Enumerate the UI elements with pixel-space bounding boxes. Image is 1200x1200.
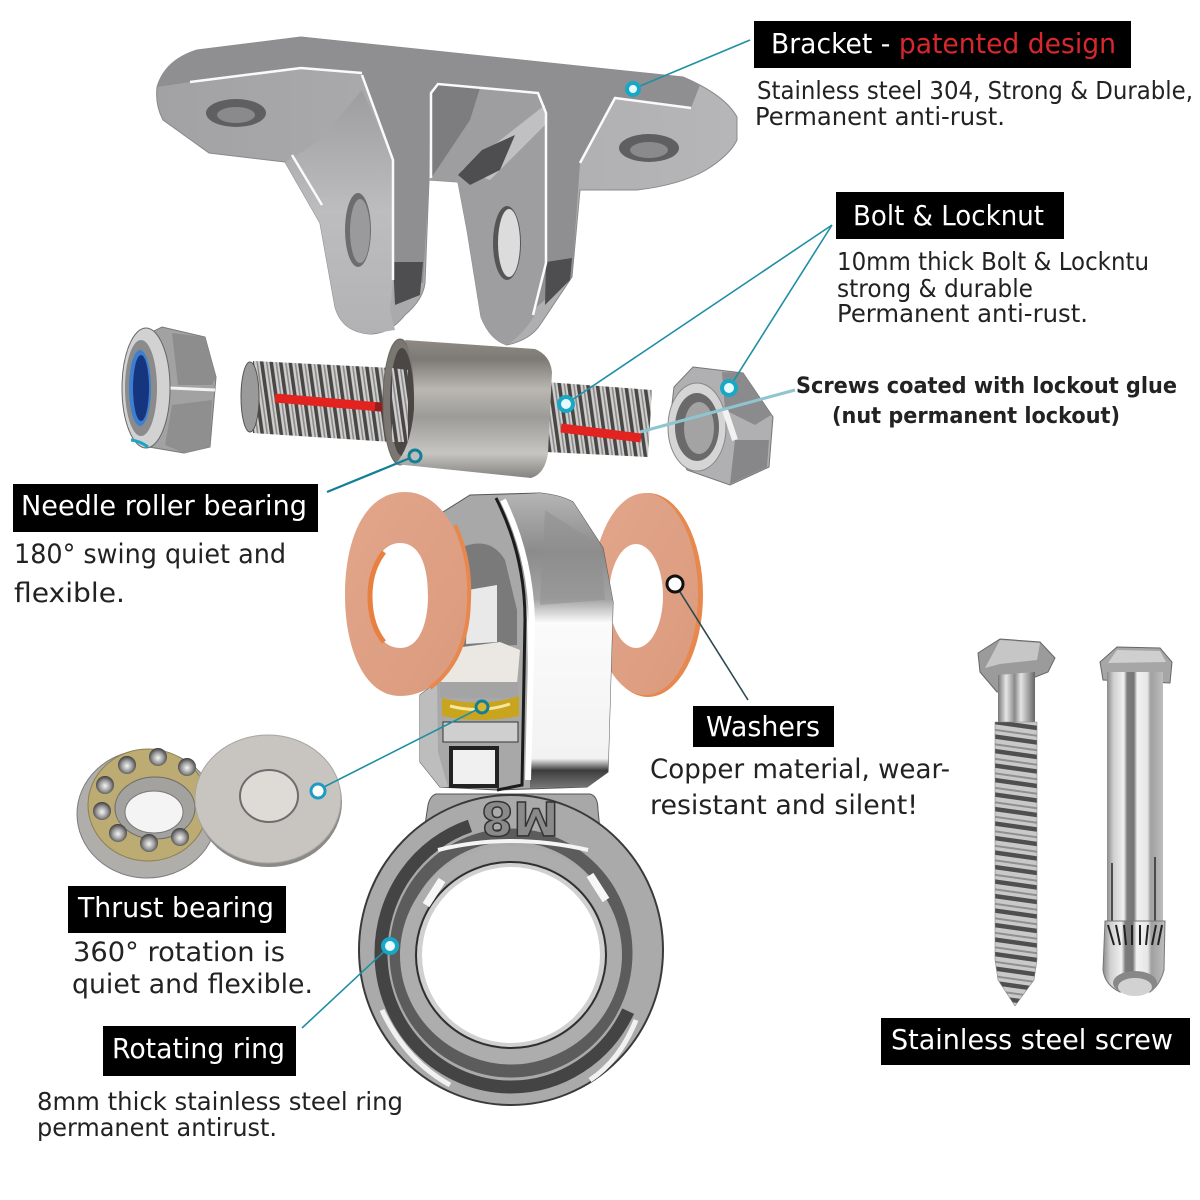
- callout lines: bolt and locknut: [559, 225, 832, 411]
- text: bolt description: strong & durable: [837, 274, 1033, 303]
- callout line: rotating ring: [302, 939, 397, 1028]
- text: rotating ring description: 8mm thick stainless steel ring: [37, 1087, 403, 1116]
- ring torus: [359, 795, 663, 1105]
- text: rotating ring description: permanent antirust.: [37, 1113, 277, 1142]
- text: needle bearing description: 180° swing quiet and: [14, 539, 286, 570]
- text: bolt description: [837, 247, 1149, 328]
- label: needle roller bearing: [13, 484, 318, 532]
- text: washers description: resistant and silent!: [650, 790, 918, 821]
- embossed size marking: M8: [481, 791, 559, 845]
- callout line: needle roller bearing: [327, 450, 421, 492]
- illustration: swivel clevis body: [420, 493, 613, 790]
- callout line: washers: [667, 576, 748, 700]
- text: lockout glue note: (nut permanent lockout): [832, 404, 1120, 429]
- ring inner rim: [416, 862, 606, 1048]
- illustration: right copper washer: [592, 493, 703, 697]
- text: bracket description: [755, 76, 1193, 131]
- illustration: thrust bearing: [77, 735, 342, 878]
- text: needle bearing description: [14, 539, 286, 609]
- label: rotating ring: [103, 1026, 296, 1076]
- label: stainless steel screw: Stainless steel screw: [891, 1023, 1173, 1056]
- text: lockout glue note: [796, 374, 1177, 429]
- text: lockout glue note: Screws coated with lockout glue: [796, 374, 1177, 399]
- text: bolt description: 10mm thick Bolt & Lockntu: [837, 247, 1149, 276]
- text: thrust bearing description: [72, 937, 313, 1000]
- label: bolt and locknut: Bolt & Locknut: [853, 199, 1044, 232]
- label: thrust bearing: Thrust bearing: [77, 891, 274, 924]
- illustration: blue locknut: [122, 327, 216, 453]
- label: bracket: Bracket - patented design: [771, 27, 1116, 60]
- label: washers: [693, 706, 834, 747]
- ring top highlights: [438, 841, 588, 850]
- illustration: lag screw: [978, 639, 1055, 1006]
- illustration: right locknut: [668, 367, 773, 485]
- label: washers: Washers: [706, 710, 820, 743]
- clevis lug window: [460, 544, 517, 648]
- bracket highlight edges: [190, 68, 691, 315]
- illustration: rotating eye ring: [359, 791, 663, 1105]
- bracket central web: [431, 83, 546, 345]
- text: thrust bearing description: 360° rotation is: [73, 937, 285, 968]
- text: bolt description: Permanent anti-rust.: [837, 299, 1088, 328]
- label: stainless steel screw: [881, 1018, 1190, 1065]
- illustration: needle roller bearing sleeve: [383, 339, 552, 478]
- gold bearing stack: [440, 682, 518, 698]
- text: washers description: Copper material, wear-: [650, 754, 950, 785]
- text: thrust bearing description: quiet and flexible.: [72, 969, 313, 1000]
- text: bracket description: Permanent anti-rust.: [755, 102, 1005, 131]
- label: bolt and locknut: [836, 192, 1064, 239]
- text: washers description: [650, 754, 950, 821]
- bracket upper rib: [157, 37, 700, 310]
- lower neck block: [451, 748, 497, 786]
- illustration: threaded bolt right: [546, 382, 652, 457]
- label: rotating ring: Rotating ring: [112, 1032, 285, 1065]
- text: needle bearing description: flexible.: [14, 578, 125, 609]
- bolt head in window: [440, 642, 520, 684]
- callout line: bracket: [627, 40, 750, 95]
- text: rotating ring description: [37, 1087, 403, 1142]
- bracket holes: [206, 99, 266, 127]
- label: bracket: [754, 21, 1131, 68]
- label: needle roller bearing: Needle roller bearing: [21, 489, 307, 522]
- bracket leg shadows: [393, 262, 423, 305]
- illustration: threaded bolt left: [241, 361, 392, 442]
- illustration: bracket: [157, 37, 737, 345]
- callout line: lockout glue: [640, 390, 795, 432]
- callout line: thrust bearing: [311, 701, 488, 798]
- illustration: expansion bolt: [1100, 647, 1172, 996]
- ring hole: [422, 867, 600, 1043]
- illustration: left copper washer: [345, 492, 469, 696]
- clevis outer face: [498, 493, 613, 788]
- ring collar: [405, 794, 620, 860]
- bracket left leg face: [285, 90, 395, 334]
- label: thrust bearing: [68, 886, 286, 933]
